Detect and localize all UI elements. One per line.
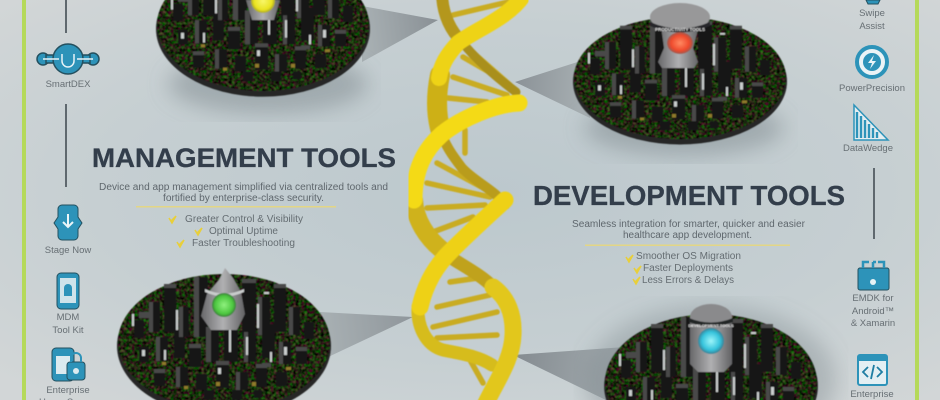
list: management benefits: Optimal Uptime [209,226,278,237]
text block: management description: Device and app management simplified via centralized tools and [99,182,388,193]
tool: SmartDEX: SmartDEX [46,79,91,90]
tool: Enterprise Browser [850,355,894,400]
icon: swipe assist [866,0,880,4]
connector wedge top left [362,6,438,62]
connector wedge bottom left [320,312,413,358]
right divider [873,168,875,239]
tool: Swipe Assist: Assist [859,21,885,32]
tool: Stage Now [45,205,91,256]
list: management benefits: Greater Control & Visibility [185,214,303,225]
yellow rule management [136,206,336,208]
tool: Swipe Assist: Swipe [859,8,885,19]
disc: development city top [573,3,787,156]
left divider middle [65,104,67,187]
left divider top [65,0,67,33]
text block: management description [99,182,388,204]
disc: management city bottom [117,268,331,400]
icon: phone and lock [52,348,85,381]
right green border [915,0,919,400]
icon: barcode wedge [854,105,888,140]
list: development benefits: Less Errors & Delays [642,275,734,286]
helix strand A lower [440,130,505,205]
text block: development description: healthcare app development. [623,230,752,241]
icon: battery bolt target [857,47,887,77]
tool: MDM Tool Kit: Tool Kit [52,325,84,336]
tool: EMDK: Android™ [852,306,894,317]
tool: DataWedge [843,105,893,154]
list: development benefits: Faster Deployments [643,263,733,274]
list: development benefits: Smoother OS Migration [636,251,741,262]
connector wedge bottom right [513,347,625,400]
helix bright strand middle [414,103,519,200]
tower with cyan light: DEVELOPMENT TOOLS [688,323,734,328]
connector wedge top right [515,58,590,118]
tool: EMDK [851,262,895,329]
tower with cyan light [688,304,734,372]
text block: management description: fortified by enterprise-class security. [163,193,324,204]
heading: development tools: DEVELOPMENT TOOLS [533,180,845,211]
helix bright strand top [439,0,523,78]
tool: MDM Tool Kit [52,273,84,336]
tool: EMDK: EMDK for [852,293,894,304]
helix strand C [418,307,492,365]
yellow rule development [585,244,790,246]
helix back strand [442,0,462,42]
helix bright strand bottom [485,287,513,400]
helix strand A upper [437,75,441,132]
helix golden left bend [414,200,442,250]
icon: SmartDEX link [37,44,99,74]
tool: PowerPrecision: PowerPrecision [839,83,905,94]
tool: Swipe Assist [859,0,885,32]
icon: code window [858,355,887,385]
disc: management city top [156,0,370,114]
helix bright strand crossing [420,200,505,307]
heading: management tools: MANAGEMENT TOOLS [92,143,396,173]
tool: Enterprise Browser: Enterprise [850,389,894,400]
tool: SmartDEX [37,44,99,90]
text block: development description: Seamless integration for smarter, quicker and easier [572,219,806,230]
tool: Enterprise Home Screen [39,348,97,400]
icon: EMDK chip box [858,262,889,290]
tower with red light: PRODUCTIVITY TOOLS [655,27,705,32]
list: management benefits [169,214,303,249]
list: development benefits [626,251,741,286]
disc: development city bottom [586,304,836,400]
tool: EMDK: & Xamarin [851,318,895,329]
icon: phone with lock [57,273,79,309]
text block: development description [572,219,806,241]
tool: Enterprise Home Screen: Enterprise [46,385,90,396]
tool: Stage Now: Stage Now [45,245,91,256]
helix mid strand lower [440,250,493,287]
left green border [22,0,26,400]
helix back strand lower [462,42,516,92]
tool: DataWedge: DataWedge [843,143,893,154]
helix rungs [427,2,510,383]
DNA helix [414,0,523,400]
icon: phone with download arrow [54,205,82,240]
list: management benefits: Faster Troubleshooting [192,238,295,249]
tower with green light [201,268,245,330]
tower with red light [650,3,710,68]
tool: PowerPrecision [839,47,905,94]
tool: MDM Tool Kit: MDM [57,312,79,323]
tower with yellow light [246,0,280,20]
